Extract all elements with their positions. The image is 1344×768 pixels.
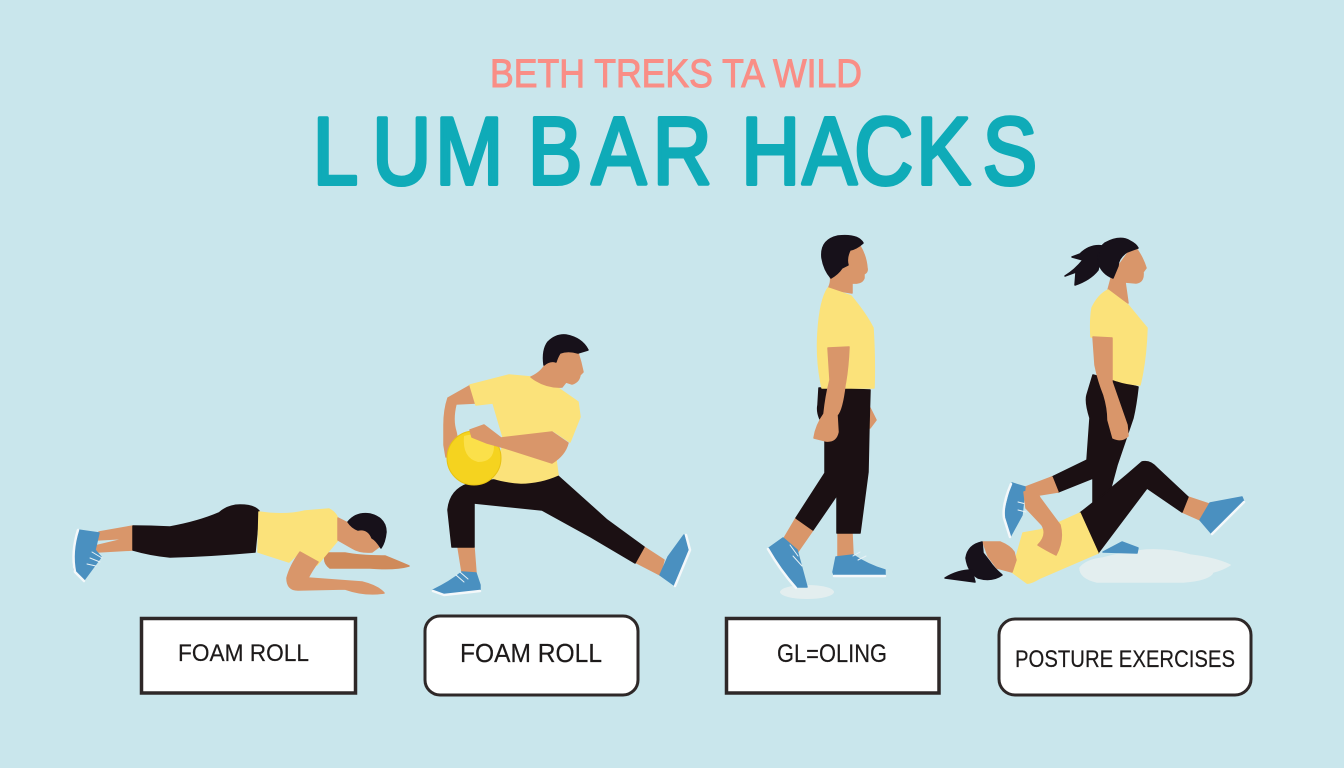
shirt [818,288,874,388]
hair [544,335,588,365]
shoes [769,538,807,587]
label: foam roll rounded: FOAM ROLL [460,638,602,668]
label: foam roll square: FOAM ROLL [178,640,309,667]
figure: plank on forearms [74,505,409,594]
neck and face [828,246,867,293]
lying hair [966,542,1002,579]
label: gl=oling square [726,618,939,693]
calf standing [1023,477,1058,497]
lying shoe raised [1200,497,1244,534]
figure: standing man walking [768,236,885,599]
lying neck and face [983,542,1016,572]
pants standing [1052,375,1138,505]
yellow ball [447,431,501,485]
arm standing [1093,337,1128,440]
neck and face [338,518,380,552]
neck and face standing [1108,248,1146,303]
legs [95,526,133,552]
hair [348,514,386,548]
lying shirt [1012,513,1098,583]
far arm [325,553,409,569]
hair standing [1098,238,1138,278]
shirt [258,509,339,565]
shirt [470,375,580,483]
arm [814,347,849,441]
subtitle: BETH TREKS TA WILD [490,52,862,96]
front arm [470,425,568,463]
lying arm [1024,491,1061,555]
shoe standing [1004,483,1025,537]
label: posture exercises rounded [999,619,1251,695]
label: foam roll square [142,618,356,693]
left arm [444,385,476,457]
pants [448,476,644,563]
figure: woman standing and woman lying [945,238,1244,583]
pants [133,505,259,557]
label: gl=oling square: GL=OLING [777,640,887,668]
neck and face [531,352,583,387]
legs [458,547,664,575]
pants [796,388,870,533]
shoes [433,572,480,594]
lying shoe [1103,542,1138,553]
shadow [780,585,834,599]
far hand [866,408,876,428]
shirt standing [1091,290,1147,385]
hair [822,236,863,278]
lying pants [1080,462,1188,553]
figure: lunge with ball [433,335,690,595]
shoe [74,530,101,580]
legs [783,518,853,557]
near arm [287,552,384,594]
label: foam roll rounded [425,616,638,695]
title: LUMBAR HACKS [313,97,1037,204]
lying ponytail [945,570,975,582]
ponytail standing [1065,246,1103,285]
floor shadow [1080,550,1230,582]
lying calf [1182,497,1212,520]
label: posture exercises rounded: POSTURE EXERCISES [1015,646,1235,673]
